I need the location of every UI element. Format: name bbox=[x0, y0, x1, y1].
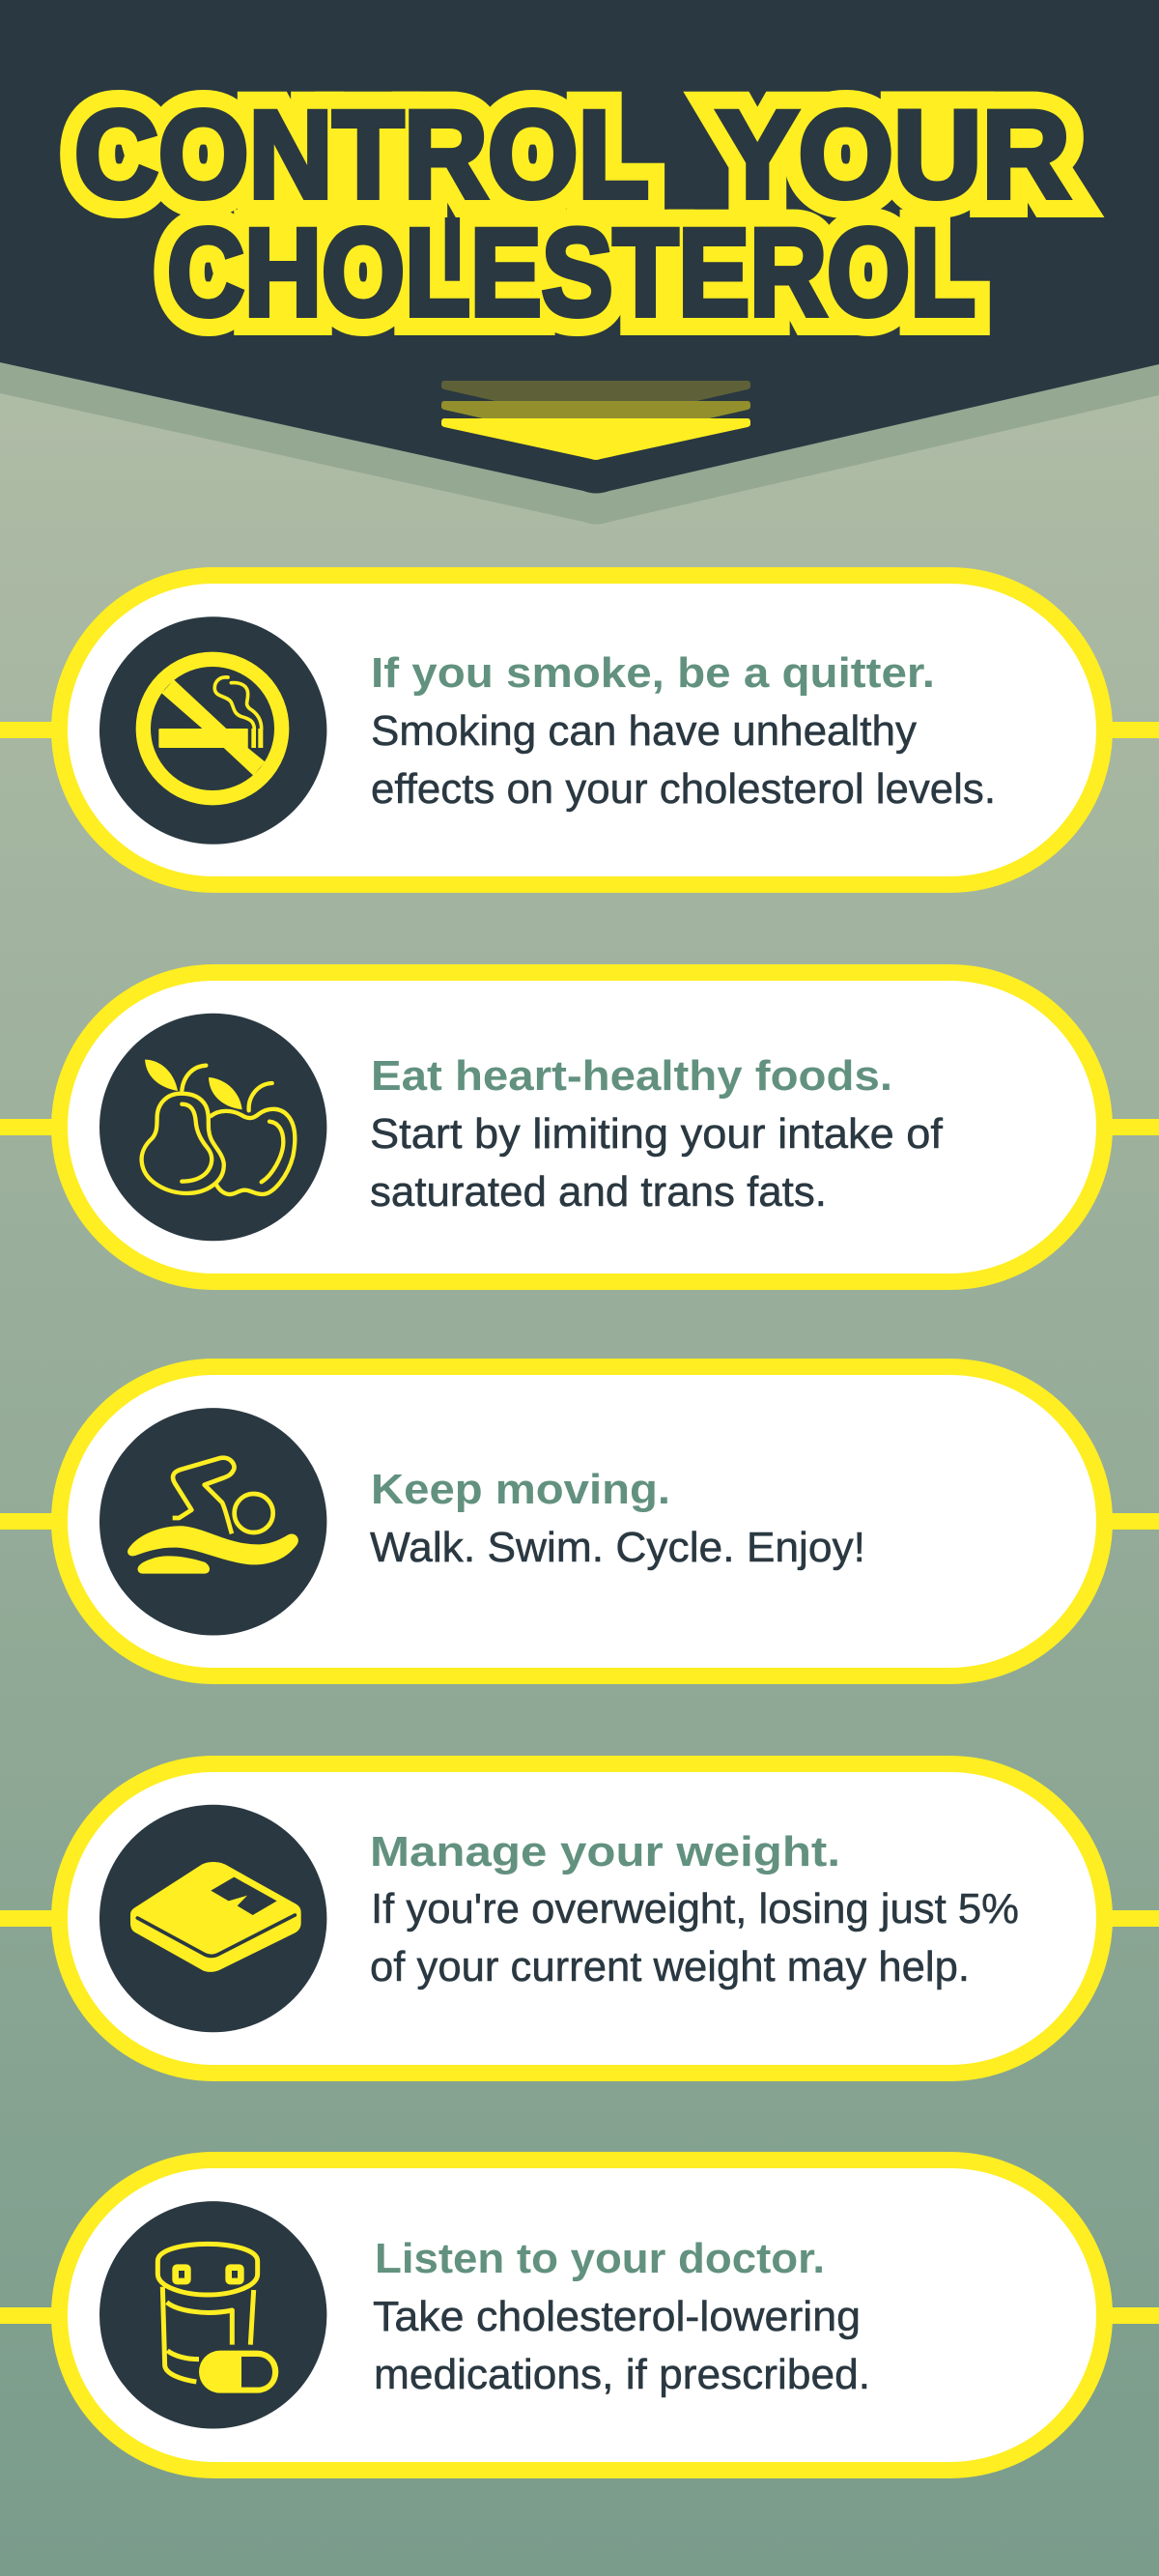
text: manage weight: If you're overweight, losing just 5% bbox=[371, 1885, 1019, 1932]
panel: quit smoking bbox=[0, 576, 1159, 885]
text: healthy foods: Eat heart-healthy foods. bbox=[371, 1052, 892, 1100]
text: listen to doctor bbox=[373, 2235, 870, 2398]
title bbox=[74, 86, 1070, 342]
header banner bbox=[0, 0, 1159, 493]
text: healthy foods: Start by limiting your intake of bbox=[370, 1110, 944, 1158]
text: keep moving: Walk. Swim. Cycle. Enjoy! bbox=[370, 1524, 865, 1571]
text: keep moving bbox=[370, 1466, 865, 1571]
panel: manage weight bbox=[0, 1764, 1159, 2074]
icon: swimmer bbox=[127, 1458, 298, 1574]
text: quit smoking: effects on your cholesterol levels. bbox=[371, 765, 996, 813]
icon: weighing scale bbox=[130, 1862, 301, 1972]
text: listen to doctor: Take cholesterol-lowering bbox=[373, 2293, 861, 2340]
panel: listen to doctor bbox=[0, 2161, 1159, 2470]
panel: keep moving bbox=[0, 1366, 1159, 1675]
title: CHOLESTEROL bbox=[167, 204, 975, 342]
text: keep moving: Keep moving. bbox=[371, 1466, 670, 1513]
text: quit smoking: Smoking can have unhealthy bbox=[371, 707, 917, 755]
title: YOUR bbox=[717, 86, 1070, 224]
text: healthy foods: saturated and trans fats. bbox=[370, 1168, 827, 1216]
icon: medicine bottle and capsule bbox=[157, 2244, 278, 2393]
text: manage weight: Manage your weight. bbox=[370, 1828, 840, 1875]
title: CONTROL bbox=[74, 86, 649, 224]
title: CONTROL bbox=[74, 86, 649, 224]
icon: stacked down arrow bbox=[441, 381, 750, 460]
title: CHOLESTEROL bbox=[167, 204, 975, 342]
text: healthy foods bbox=[370, 1052, 944, 1216]
text: manage weight bbox=[370, 1828, 1019, 1990]
icon: no smoking bbox=[143, 659, 282, 798]
header banner shadow bbox=[0, 0, 1159, 524]
text: listen to doctor: medications, if prescribed. bbox=[374, 2351, 870, 2398]
text: listen to doctor: Listen to your doctor. bbox=[375, 2235, 825, 2282]
text: quit smoking bbox=[371, 649, 996, 813]
text: manage weight: of your current weight may help. bbox=[370, 1943, 970, 1990]
title: YOUR bbox=[717, 86, 1070, 224]
icon: pear and apple bbox=[142, 1060, 295, 1194]
panel: healthy foods bbox=[0, 972, 1159, 1281]
text: quit smoking: If you smoke, be a quitter. bbox=[371, 649, 935, 697]
